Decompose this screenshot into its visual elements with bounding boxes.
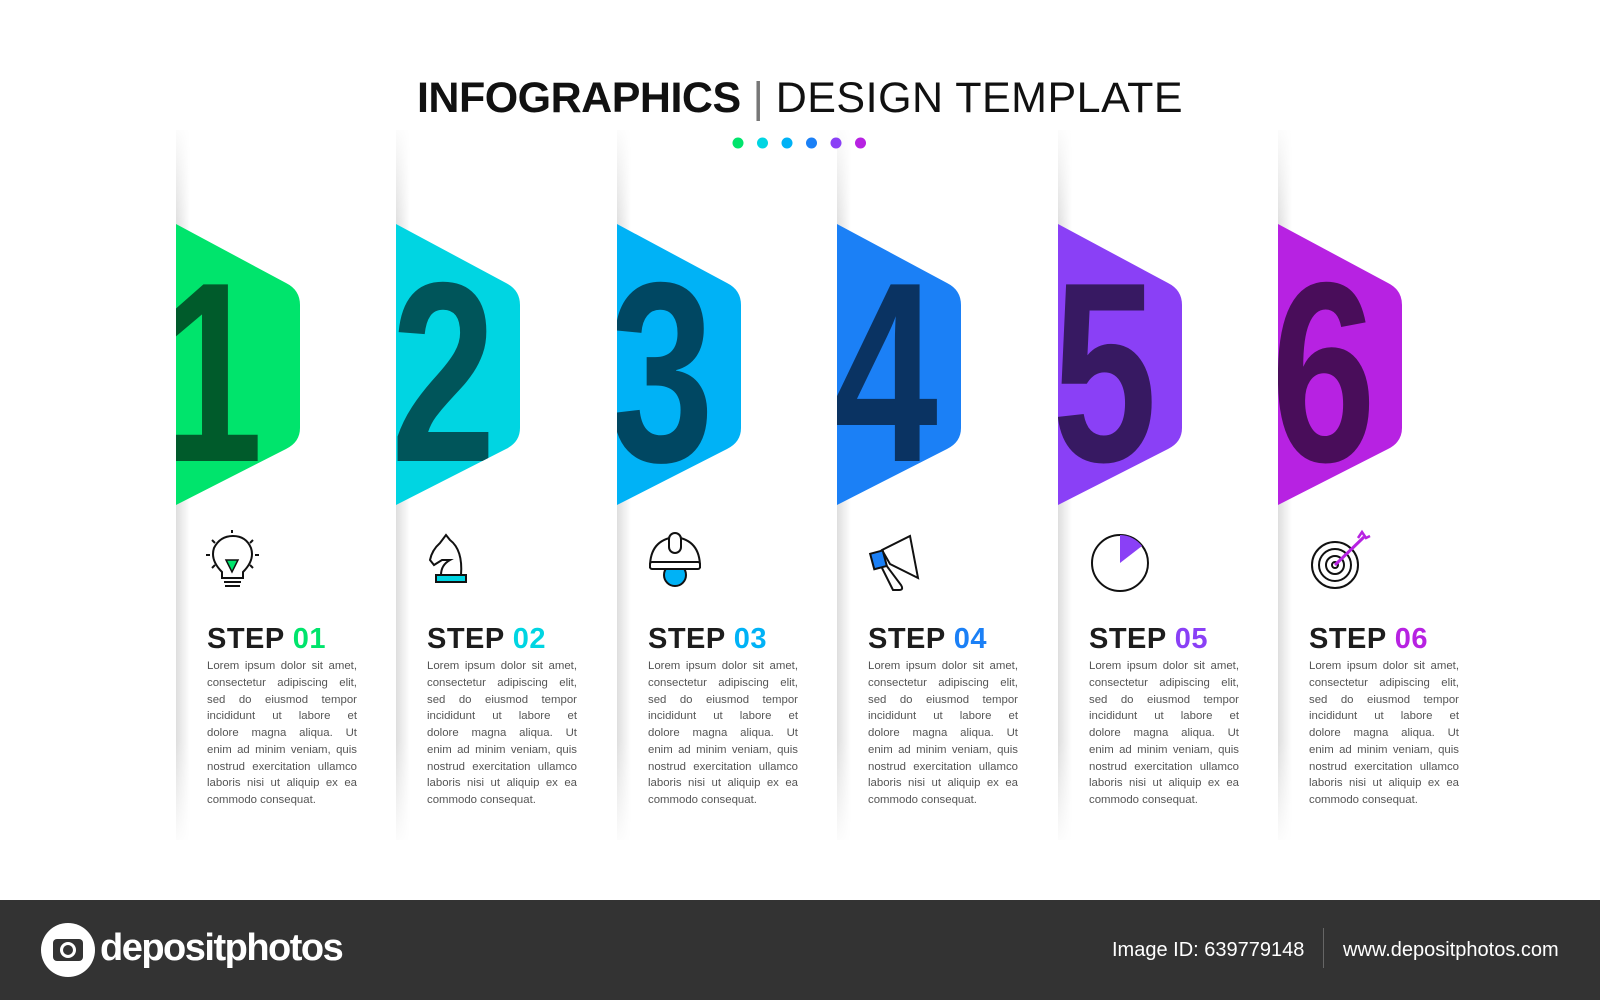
- step 01 text: consectetur: [207, 677, 266, 689]
- step 01 text: nostrud: [207, 760, 245, 772]
- step 06 text: Lorem: [1309, 660, 1341, 672]
- step 06 text: commodo consequat.: [1309, 794, 1418, 806]
- step 05 text: laboris: [1089, 777, 1123, 789]
- step 02 text: incididunt: [427, 710, 475, 722]
- step 06 text: aliqua.: [1401, 727, 1435, 739]
- step 01 text: commodo consequat.: [207, 794, 316, 806]
- step 06 text: ut: [1374, 710, 1384, 722]
- step 05 text: veniam,: [1173, 744, 1213, 756]
- step 01 text: sed: [207, 694, 225, 706]
- step 02 text: [427, 623, 577, 806]
- step 04 text: ad: [898, 744, 911, 756]
- step 03 text: quis: [777, 744, 798, 756]
- step 03 text: sit: [753, 660, 764, 672]
- step 05 text: ipsum: [1127, 660, 1157, 672]
- number shape 4: 4: [833, 229, 938, 516]
- step 06 text: dolor: [1383, 660, 1408, 672]
- step 01 text: tempor: [322, 694, 357, 706]
- step 03 text: minim: [696, 744, 726, 756]
- title: INFOGRAPHICS | DESIGN TEMPLATE: [417, 74, 1183, 122]
- step 01 text: dolor: [281, 660, 306, 672]
- step 04 text: ea: [1005, 777, 1018, 789]
- step 01 text: ad: [237, 744, 250, 756]
- step 02 text: enim: [427, 744, 452, 756]
- step 06 text: [1309, 623, 1459, 806]
- step 01 text: quis: [336, 744, 357, 756]
- step 05 text: aliquip: [1168, 777, 1201, 789]
- step 01 text: sit: [312, 660, 323, 672]
- step 02 text: aliqua.: [519, 727, 553, 739]
- step 01 text: exercitation: [252, 760, 310, 772]
- step 01 text: et: [348, 710, 357, 722]
- footer logo: depositphotos: [100, 927, 342, 969]
- footer url: www.depositphotos.com: [1343, 939, 1559, 961]
- step 05 text: et: [1230, 710, 1239, 722]
- step 01 text: dolore: [207, 727, 239, 739]
- step 04 text: nostrud: [868, 760, 906, 772]
- step 06 text: do: [1341, 694, 1354, 706]
- number shape 1: [176, 224, 300, 505]
- step 05 text: nostrud: [1089, 760, 1127, 772]
- step 01 text: ut: [271, 777, 280, 789]
- step 02 text: commodo consequat.: [427, 794, 536, 806]
- step 01 text: adipiscing: [277, 677, 328, 689]
- step 06 text: amet,: [1430, 660, 1459, 672]
- step 04 text: elit,: [1000, 677, 1018, 689]
- step 04 text: ullamco: [979, 760, 1018, 772]
- step 04 text: quis: [997, 744, 1018, 756]
- step 04 text: Ut: [1007, 727, 1018, 739]
- step 05 text: elit,: [1221, 677, 1239, 689]
- step 02 text: Ut: [566, 727, 577, 739]
- step 06 text: adipiscing: [1379, 677, 1430, 689]
- number shape 2: 2: [391, 229, 496, 516]
- step 06 text: sed: [1309, 694, 1327, 706]
- step 01 text: ut: [272, 710, 282, 722]
- step 04 text: dolor: [942, 660, 967, 672]
- step 06 text: labore: [1401, 710, 1432, 722]
- colored dots: [732, 138, 866, 148]
- step 05 text: [1089, 623, 1239, 806]
- step 05 text: sed: [1089, 694, 1107, 706]
- step 01 text: veniam,: [291, 744, 331, 756]
- step 01 text: magna: [252, 727, 286, 739]
- step 04 text: sit: [973, 660, 984, 672]
- step 06 text: tempor: [1424, 694, 1459, 706]
- step 05 text: aliqua.: [1181, 727, 1215, 739]
- step 04 text: consectetur: [868, 677, 927, 689]
- step 04 text: veniam,: [952, 744, 992, 756]
- step 04 text: do: [900, 694, 913, 706]
- step 04 text: exercitation: [913, 760, 972, 772]
- step 06 text: dolore: [1309, 727, 1341, 739]
- step 06 text: veniam,: [1393, 744, 1433, 756]
- step 04 text: ex: [987, 777, 999, 789]
- number shape 3: 3: [609, 229, 714, 516]
- step 04 text: ut: [932, 777, 941, 789]
- step 05 text: consectetur: [1089, 677, 1148, 689]
- step 05 text: exercitation: [1134, 760, 1192, 772]
- step 06 text: STEP 06: [1309, 623, 1428, 655]
- step 05 text: ullamco: [1200, 760, 1239, 772]
- step 04 text: labore: [960, 710, 991, 722]
- step 02 text: eiusmod: [485, 694, 528, 706]
- step 02 text: amet,: [548, 660, 577, 672]
- step 03 text: dolor: [722, 660, 747, 672]
- step 06 text: et: [1450, 710, 1459, 722]
- step 04 text: Lorem: [868, 660, 900, 672]
- step 02 text: ipsum: [465, 660, 495, 672]
- step 03 text: veniam,: [732, 744, 772, 756]
- step 02 text: ut: [491, 777, 500, 789]
- step 06 text: ad: [1339, 744, 1352, 756]
- step 04 text: et: [1008, 710, 1018, 722]
- step 04 text: aliqua.: [960, 727, 994, 739]
- step 04 text: tempor: [983, 694, 1018, 706]
- step 05 text: ut: [1153, 777, 1162, 789]
- step 03 text: tempor: [763, 694, 798, 706]
- step 02 text: minim: [475, 744, 505, 756]
- step 01 text: [207, 623, 357, 806]
- step 06 text: nostrud: [1309, 760, 1347, 772]
- step 05 text: enim: [1089, 744, 1114, 756]
- number shape 1: 1: [158, 229, 263, 516]
- step 01 text: ea: [344, 777, 357, 789]
- step 06 text: enim: [1309, 744, 1334, 756]
- step 03 text: Ut: [787, 727, 798, 739]
- step 03 text: STEP 03: [648, 623, 767, 655]
- step 01 text: laboris: [207, 777, 241, 789]
- step 02 text: ullamco: [538, 760, 577, 772]
- step 03 text: ut: [713, 710, 723, 722]
- step 05 text: ea: [1226, 777, 1239, 789]
- step 04 text: dolore: [868, 727, 900, 739]
- icon: megaphone: [870, 536, 918, 590]
- step 03 text: enim: [648, 744, 673, 756]
- step 02 text: ex: [546, 777, 558, 789]
- step 03 text: ullamco: [759, 760, 798, 772]
- step 02 text: dolore: [427, 727, 459, 739]
- step 06 text: elit,: [1441, 677, 1459, 689]
- step 02 text: magna: [472, 727, 506, 739]
- step 03 text: magna: [692, 727, 727, 739]
- step 03 text: nostrud: [648, 760, 686, 772]
- step 04 text: adipiscing: [938, 677, 989, 689]
- step 02 text: sed: [427, 694, 445, 706]
- step 03 text: aliqua.: [740, 727, 774, 739]
- number shape 5: 5: [1052, 229, 1157, 516]
- step 06 text: sit: [1414, 660, 1425, 672]
- step 01 text: nisi: [247, 777, 264, 789]
- step 01 text: aliquip: [286, 777, 319, 789]
- icon: light bulb: [206, 530, 259, 586]
- step 06 text: laboris: [1309, 777, 1343, 789]
- step 02 text: elit,: [559, 677, 577, 689]
- step 04 text: minim: [916, 744, 946, 756]
- step 05 text: Ut: [1228, 727, 1239, 739]
- step 01 text: elit,: [339, 677, 357, 689]
- step 06 text: magna: [1354, 727, 1388, 739]
- step 03 text: et: [788, 710, 798, 722]
- step 03 text: labore: [740, 710, 771, 722]
- step 01 text: Ut: [346, 727, 357, 739]
- step 02 text: et: [568, 710, 577, 722]
- step 02 text: STEP 02: [427, 623, 546, 655]
- step 03 text: do: [680, 694, 693, 706]
- step 05 text: quis: [1218, 744, 1239, 756]
- step 02 text: Lorem: [427, 660, 459, 672]
- step 03 text: Lorem: [648, 660, 680, 672]
- icon: clock: [1092, 535, 1148, 591]
- step 05 text: magna: [1134, 727, 1168, 739]
- step 02 text: aliquip: [506, 777, 539, 789]
- step 02 text: tempor: [542, 694, 577, 706]
- step 06 text: eiusmod: [1367, 694, 1410, 706]
- step 03 text: consectetur: [648, 677, 707, 689]
- step 02 text: nostrud: [427, 760, 465, 772]
- step 04 text: enim: [868, 744, 893, 756]
- step 05 text: sit: [1194, 660, 1205, 672]
- step 02 text: do: [459, 694, 472, 706]
- step 04 text: amet,: [990, 660, 1018, 672]
- step 02 text: ad: [457, 744, 470, 756]
- step 02 text: consectetur: [427, 677, 486, 689]
- step 02 text: labore: [519, 710, 550, 722]
- step 05 text: minim: [1137, 744, 1167, 756]
- step 05 text: tempor: [1204, 694, 1239, 706]
- footer logo: [41, 923, 342, 977]
- step 06 text: aliquip: [1388, 777, 1421, 789]
- step 06 text: ex: [1428, 777, 1440, 789]
- step 05 text: dolor: [1163, 660, 1188, 672]
- step 03 text: ut: [712, 777, 721, 789]
- step 03 text: nisi: [688, 777, 705, 789]
- step 04 text: ut: [933, 710, 943, 722]
- icon: helmet with gear: [650, 533, 700, 586]
- step 02 text: laboris: [427, 777, 461, 789]
- step 01 text: ullamco: [318, 760, 357, 772]
- step 04 text: laboris: [868, 777, 902, 789]
- step 03 text: sed: [648, 694, 666, 706]
- step 05 text: incididunt: [1089, 710, 1137, 722]
- step 06 text: consectetur: [1309, 677, 1368, 689]
- step 03 text: [648, 623, 798, 806]
- step 02 text: ut: [492, 710, 502, 722]
- step 05 text: adipiscing: [1159, 677, 1210, 689]
- step 06 text: minim: [1357, 744, 1387, 756]
- step 04 text: ipsum: [906, 660, 936, 672]
- step 06 text: ullamco: [1420, 760, 1459, 772]
- step 05 text: amet,: [1210, 660, 1239, 672]
- step 04 text: [868, 623, 1018, 806]
- step 05 text: ex: [1208, 777, 1220, 789]
- step 04 text: STEP 04: [868, 623, 987, 655]
- step 06 text: ut: [1373, 777, 1382, 789]
- background panels and number shapes: [176, 147, 1402, 822]
- step 06 text: Ut: [1448, 727, 1459, 739]
- step 03 text: laboris: [648, 777, 682, 789]
- step 01 text: enim: [207, 744, 232, 756]
- step 05 text: ut: [1154, 710, 1164, 722]
- step 02 text: ea: [564, 777, 577, 789]
- step 05 text: eiusmod: [1147, 694, 1190, 706]
- step 05 text: labore: [1181, 710, 1212, 722]
- step 03 text: elit,: [780, 677, 798, 689]
- step 04 text: commodo consequat.: [868, 794, 977, 806]
- step 05 text: nisi: [1129, 777, 1146, 789]
- step 01 text: incididunt: [207, 710, 255, 722]
- step 06 text: quis: [1438, 744, 1459, 756]
- step 01 text: eiusmod: [265, 694, 308, 706]
- step 03 text: commodo consequat.: [648, 794, 757, 806]
- step 04 text: eiusmod: [926, 694, 969, 706]
- step 06 text: nisi: [1349, 777, 1366, 789]
- number shape 6: 6: [1271, 229, 1376, 516]
- step 05 text: Lorem: [1089, 660, 1121, 672]
- step 01 text: ex: [326, 777, 338, 789]
- step 02 text: veniam,: [511, 744, 551, 756]
- footer image id: Image ID: 639779148: [1112, 939, 1304, 961]
- step 02 text: dolor: [501, 660, 526, 672]
- step 01 text: amet,: [328, 660, 357, 672]
- step 05 text: commodo consequat.: [1089, 794, 1198, 806]
- step 01 text: do: [239, 694, 252, 706]
- step 02 text: nisi: [467, 777, 484, 789]
- step 04 text: magna: [912, 727, 947, 739]
- step 06 text: exercitation: [1354, 760, 1412, 772]
- icon: target: [1312, 532, 1370, 588]
- step 03 text: ea: [785, 777, 798, 789]
- step 01 text: labore: [299, 710, 330, 722]
- step 03 text: exercitation: [693, 760, 752, 772]
- step 03 text: incididunt: [648, 710, 696, 722]
- step 04 text: nisi: [908, 777, 925, 789]
- step 03 text: aliquip: [727, 777, 760, 789]
- step 06 text: ipsum: [1347, 660, 1377, 672]
- step 06 text: ea: [1446, 777, 1459, 789]
- step 01 text: Lorem: [207, 660, 239, 672]
- step 05 text: do: [1121, 694, 1134, 706]
- step 03 text: ex: [767, 777, 779, 789]
- step 03 text: adipiscing: [718, 677, 769, 689]
- step 03 text: amet,: [770, 660, 798, 672]
- step 02 text: quis: [556, 744, 577, 756]
- step 02 text: sit: [532, 660, 543, 672]
- icon: chess knight: [430, 535, 466, 582]
- step 01 text: minim: [255, 744, 285, 756]
- step 04 text: sed: [868, 694, 886, 706]
- step 05 text: dolore: [1089, 727, 1121, 739]
- step 02 text: exercitation: [472, 760, 530, 772]
- step 06 text: incididunt: [1309, 710, 1357, 722]
- step 03 text: eiusmod: [706, 694, 749, 706]
- step 03 text: dolore: [648, 727, 680, 739]
- step 05 text: ad: [1119, 744, 1132, 756]
- step 01 text: STEP 01: [207, 623, 326, 655]
- step 05 text: STEP 05: [1089, 623, 1208, 655]
- step 02 text: adipiscing: [497, 677, 548, 689]
- step 04 text: aliquip: [947, 777, 980, 789]
- step 03 text: ad: [678, 744, 691, 756]
- step 04 text: incididunt: [868, 710, 916, 722]
- step 01 text: ipsum: [245, 660, 275, 672]
- footer bar: [0, 900, 1600, 1000]
- step 03 text: ipsum: [686, 660, 716, 672]
- step 01 text: aliqua.: [299, 727, 333, 739]
